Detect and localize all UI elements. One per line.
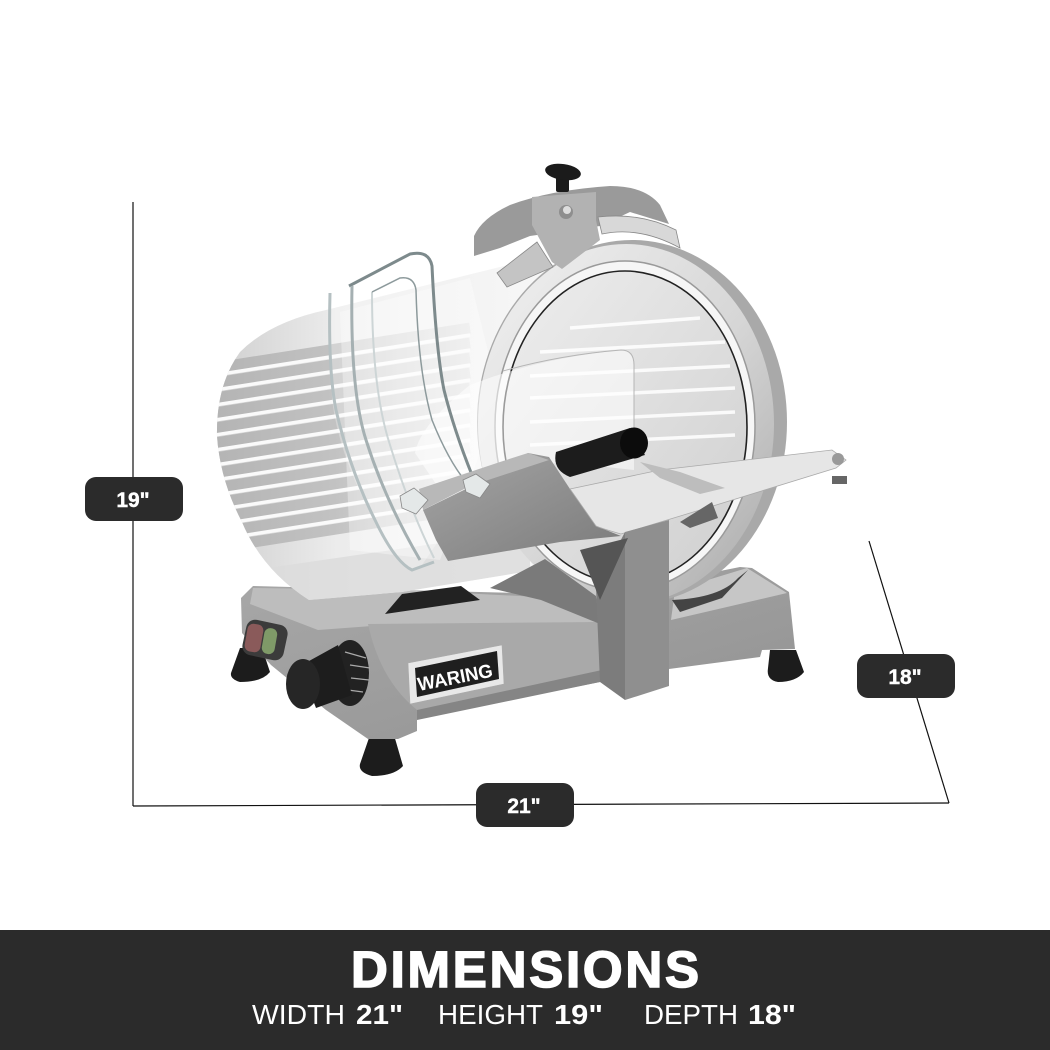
front block underside [417,670,600,720]
footer measurements: 21" [356,999,403,1030]
carriage tray [400,453,621,561]
top cover [474,186,680,287]
WARING badge: WARING [416,661,495,696]
base body [241,567,795,739]
depth dimension line [869,541,949,803]
top knob [544,162,582,192]
footer measurements: 19" [554,999,603,1030]
power switch [241,618,289,662]
footer measurements: DEPTH [644,999,738,1030]
feet [231,648,804,776]
depth pill: 18" [888,666,922,689]
width pill: 21" [507,795,541,818]
base top surface [250,588,600,630]
vertical dimension line [132,202,134,806]
support column [580,520,669,700]
blade housing ring [477,240,787,604]
width dimension line [133,803,949,806]
footer measurements [252,999,796,1030]
footer measurements: WIDTH [252,999,345,1030]
food guard back plate [415,350,634,490]
footer measurements: HEIGHT [438,999,543,1030]
blade ring highlight [478,244,774,604]
WARING badge [408,645,504,704]
width pill [476,783,574,827]
slicing table arm [570,450,847,534]
footer title: DIMENSIONS [351,941,699,998]
front block [368,622,602,710]
footer band [0,930,1050,1050]
glass food guard [330,252,480,570]
black handle [555,428,648,477]
meat slicer product illustration [215,162,847,776]
lower blade shadow [672,570,748,612]
height pill [85,477,183,521]
thickness dial knob [286,640,370,709]
base right top [671,568,787,620]
footer measurements: 18" [748,999,796,1030]
depth pill [857,654,955,698]
height pill: 19" [116,489,150,512]
food plate with ridges [215,264,560,600]
base slope [490,559,600,624]
plate mount bracket [385,586,480,614]
blade disc [415,271,747,583]
blade inner ring [495,261,755,591]
